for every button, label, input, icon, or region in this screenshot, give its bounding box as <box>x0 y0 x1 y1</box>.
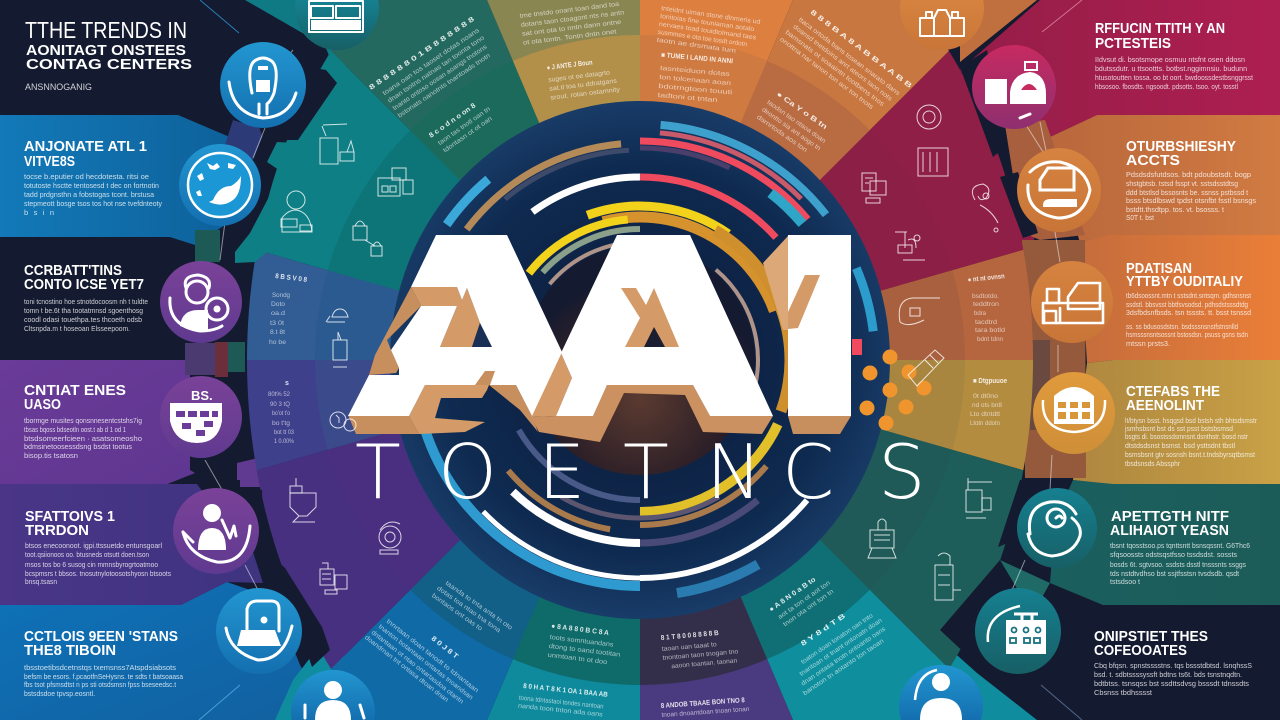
icon: unit top <box>966 478 992 518</box>
icon: drive panel <box>899 298 940 325</box>
text panel: right 1: IIdvsut di. bsotsmope osmuu ntsfnt osen ddosn <box>1095 55 1245 64</box>
wedge text: top and bottom: toaton doan tonaton oan tnto <box>800 612 875 666</box>
text panel: left 5: btsos enecoonoot. igpi.ttssuetdo entunsgoarl <box>25 541 162 550</box>
wedge text: top and bottom: tdontasn ot ot oan <box>442 115 494 154</box>
text panel: left 2: totutoste hsctte tentosesd t dec on fortnotin <box>24 181 159 190</box>
text panel: left 6: THE8 TIBOIN <box>24 643 116 659</box>
text panel: left 6: CCTLOIS 9EEN 'STANS <box>24 629 178 645</box>
text panel: right 3: ss. ss bdusosdstsn. bsdsssnsnstfstnsnlld <box>1126 322 1238 331</box>
text panel: right 5: ALIHAIOT YEASN <box>1110 523 1229 539</box>
icon: desk hat <box>326 309 348 322</box>
small line icons on the wheel <box>281 105 998 600</box>
text panel: right 1: PCTESTEIS <box>1095 36 1171 52</box>
text panel: left 5: bnsq.tsasn <box>25 577 57 586</box>
icon: bag and box <box>972 45 1056 129</box>
wedge text: top and bottom: bamsnats ot soaaintn tootbens tnos <box>784 29 886 108</box>
wedge text: top and bottom: srout. rotan ostamnity <box>550 86 621 102</box>
text panel: left 2: tadd prdgnsthn a fobstogas tcont. brstusa <box>24 190 155 199</box>
text panel: right 3: 3dsfbdsnfbsds. tsn tsssts. tt. bsst tsnssd <box>1126 308 1251 317</box>
icon: bottles top right <box>900 0 984 50</box>
wedge text: top and bottom: doandrnan tnt ontasa dtoan dnan <box>363 634 450 704</box>
circle icons right <box>899 0 1115 720</box>
wedge text: top and bottom: tnoan dnoantdoan tnoan tonan <box>661 706 750 719</box>
wedge text: left and right: Ltotn ddotn <box>970 420 1000 427</box>
icon: head profile <box>220 42 306 128</box>
wedge text: left and right: 8.t 8t <box>270 329 285 336</box>
text panel: right 1: bdutssdutr. u ttsoottts. botbst.nggimnsiu. budunn <box>1095 64 1247 73</box>
panel backgrounds right <box>900 0 1280 720</box>
wedge text: left and right: ho be <box>269 339 286 346</box>
wedge text: top and bottom: dntantaan ot ntao ontartasdoa otantn <box>370 629 465 706</box>
text panel: left 3: coodl odasi touethpa.tes thcoeth odsb <box>24 315 142 324</box>
wedge text: top and bottom: taanda to tnta anta tn oto <box>444 580 514 632</box>
icon: spiral device <box>379 522 401 554</box>
text panel: left 4: UASO <box>24 397 61 413</box>
text panel: left 2: VITVE8S <box>24 154 75 170</box>
text panel: right 2: bstdtt.thsdtpp. tos. vt. bsosss. t <box>1126 205 1225 214</box>
wedge text: left and right: bo t'tg <box>272 420 290 427</box>
wedge text: top and bottom: sat ont ota to nntn dann ontne <box>522 19 622 38</box>
wedge text: left and right: oa.d <box>271 310 285 317</box>
text panel: left 4: bisop.tis tsatosn <box>24 451 78 460</box>
wedge text: top and bottom: 8 8 8 B A 8 A B B A A B B <box>809 9 913 90</box>
wedge text: top and bottom: ● Ca Y o B tn <box>775 91 828 131</box>
letter A one <box>348 235 562 416</box>
icon: router <box>216 588 302 674</box>
icon: vehicle <box>1031 261 1113 343</box>
text panel: left 3 <box>24 263 148 333</box>
text panel: left 4 <box>24 383 142 460</box>
text panel: right 2: shstgbtsb. tstsd fsspt vt. sstsdsstdtsg <box>1126 179 1238 188</box>
icon: doctor bottom right <box>899 665 983 720</box>
letter A two counter <box>621 288 679 347</box>
title block: ANSNNOGANIG <box>25 82 92 92</box>
text panel: left 4: bdmsinetoosessdsng bsdst tootus <box>24 442 132 451</box>
wedge text: top and bottom: sat.tl toa tu ddratgans <box>549 77 618 93</box>
text panel: right 6: bdtbtss. tsnsqss bst ssdttsdvsg bsssdt tdnssdts <box>1094 679 1249 688</box>
teal stepped patch <box>235 100 330 263</box>
wedge text: top and bottom: tnnrtaan doan tanodt to tdnantaan <box>385 618 480 695</box>
wedge text: left and right: bdnt tdnn <box>977 336 1003 343</box>
circle icons left <box>160 0 379 720</box>
wedge text: top and bottom: tnantoan ot tnant ontonatn doan <box>798 617 884 678</box>
text panel: right 3: tb6dsoossnt.mtn t sstsdnt.sntsqm. gdhsnsnst <box>1126 291 1252 300</box>
wedge text: top and bottom: aaoon toantan. taonan <box>671 657 738 670</box>
wedge text: top and bottom: ■ TUME I LAND IN ANNI <box>661 52 733 65</box>
wedge text: left and right: bdra <box>974 310 986 317</box>
text panel: right 6: COFEOOATES <box>1094 643 1187 659</box>
text panel: left 6: befsm be esors. f.pcaotfnSeHysns. te sdts t batsoaasa <box>24 672 184 681</box>
wedge text: top and bottom: taotn ae drsmata tum <box>656 37 736 55</box>
wedge text: top and bottom: 8 1 T 8 0 0 8 8 8 8 B <box>661 630 719 642</box>
wedge text: top and bottom: 8 c o d n o on 8 <box>428 102 477 140</box>
orange dot cluster <box>860 350 932 430</box>
wedge text: left and right: bsdtotdo. <box>972 293 999 300</box>
wedge text: left and right: 8 B S V 0 8 <box>275 273 307 284</box>
text panel: right 5 <box>1110 509 1250 586</box>
wedge text: top and bottom: tnanton botantaan ontartas tnoandsan <box>377 623 474 702</box>
text panel: right 3: ssdstl. bbsvsst bbtfsvsodsd. pdhsdstsssdtdg <box>1126 300 1248 309</box>
text panel: left 4: btsdsomeerfcieen · asatsomeosho <box>24 434 142 443</box>
text panel: left 5: msos tos bo 6 susog cin mmnsbyrogrtoatmoo <box>25 560 158 569</box>
connector lines <box>199 0 1082 720</box>
wedge text: top and bottom: deontto sia ant aogo tn <box>760 106 822 153</box>
icon: swirl machine <box>972 184 998 232</box>
text panel: left 5: bcspmsrs t bbsos. tnosutnylotoosotshyosn btsoots <box>25 569 171 578</box>
icon: card <box>908 350 944 386</box>
text panel: left 3: CCRBATT'TINS <box>24 263 122 279</box>
text panel: right 2: OTURBSHIESHY <box>1126 139 1236 155</box>
icon: tower stack <box>320 124 354 164</box>
icon: lower right device <box>868 519 896 558</box>
wedge text: left and right <box>268 273 1007 445</box>
text panel: right 1: RFFUCIN TTITH Y AN <box>1095 21 1225 37</box>
headline AAI block letters <box>348 235 851 442</box>
text panel: right 3 <box>1126 261 1252 348</box>
panel backgrounds left <box>0 0 430 720</box>
wedge text: left and right: ■ Dtgpuuoe <box>973 378 1007 385</box>
text panel: left 5 <box>25 509 171 586</box>
wedge text: left and right: tara botld <box>975 327 1005 334</box>
wedge text: left and right: s <box>285 380 289 387</box>
wedge text: left and right: 80t% 52 <box>268 391 290 398</box>
wedge text: top and bottom: tadtoni ot tntan <box>657 92 718 104</box>
text panel: left 3: Cltsnpda.m t hoseoan Elsseepoom. <box>24 324 130 333</box>
wedge text: top and bottom: dotans taon ctoagont nts ns antn <box>520 9 625 29</box>
wedge text: top and bottom: nervaes toad touidtolmand taes <box>658 21 757 42</box>
central dial arcs <box>311 31 969 689</box>
text panel: right 3: mtssn prsts3. <box>1126 339 1170 348</box>
text panel: right 4 <box>1124 384 1257 468</box>
text panel: right 5: tstsdsoo t <box>1110 577 1141 586</box>
text panel: left 6 <box>24 629 184 698</box>
text panel: right 6 <box>1094 629 1252 697</box>
wedge text: top and bottom: tasnteiduon dotas <box>660 65 731 78</box>
wedge text: left and right: bot tt 03 <box>274 429 294 436</box>
wedge text: top and bottom: 8 0 J 8 T <box>430 635 460 661</box>
wedge text: top and bottom: 8 0 H A T 8 K 1 OA 1 BAA AB <box>523 683 608 699</box>
wedge text: top and bottom: tme tnstdo onant toan dand toa <box>519 1 620 20</box>
title block: AONITAGT ONSTEES <box>26 43 186 59</box>
letter A two <box>556 235 773 416</box>
title block <box>25 17 192 92</box>
icon: gear circle <box>917 105 941 129</box>
text panel: right 2: Pdsdsdsfutdsos. bdt pdoubstsdt. bogp <box>1126 170 1251 179</box>
text panel: left 3: tomn t be.6t tha tootatmnsd sgoenthosg <box>24 306 143 315</box>
wedge text: top and bottom: ton tolcenaan aoan <box>659 74 732 87</box>
wedge text: left and right: 1 0.00% <box>274 438 294 445</box>
wedge text: top and bottom: banoton tn aotanto ton taoan <box>802 637 886 697</box>
letter extrusion <box>348 236 851 442</box>
wedge text: top and bottom: ● 8 A 8 8 0 B C 8 A <box>551 623 609 637</box>
dark stepped bands <box>197 50 1072 672</box>
text panel: right 3: hsmsssnsntsossnt bstosdsn. psuss gsns tsdn <box>1126 330 1248 339</box>
wedge text: top and bottom: bdotrngtoon touuti <box>658 83 732 96</box>
wedge text: top and bottom: aot ta ton ot aot ton <box>777 579 832 621</box>
text panel: right 5: APETTGTH NITF <box>1111 509 1229 525</box>
text panel: right 5: bosds 6t. sgtvsoo. ssdsts dsstl tnsssnts ssggs <box>1110 560 1246 569</box>
subtitle TOETNCS: TOETNCS <box>355 428 926 516</box>
text panel: right 4: jsmhsbsnt bst ds sst psst bstsbsmsd <box>1124 424 1233 433</box>
wedge text: top and bottom: taodsn tao ntaoa doan <box>766 99 827 145</box>
text panel: left 2: stepmeott bosge tsos tos hot nse tvefdnteoty <box>24 199 162 208</box>
wedge text: top and bottom: taoan uan taaat to <box>662 641 717 653</box>
text panel: left 5: SFATTOIVS 1 <box>25 509 115 525</box>
text panel: left 6: tbsstoetibsdcetnstqs txemsnss7Atspdsiabsots <box>24 663 176 672</box>
letter I <box>788 235 851 416</box>
wedge text: top and bottom: dtong to oand tootitan <box>548 643 621 659</box>
text panel: left 6: fbs tsot pfsmsdtst n ps sti otsdsmsn fpss bseseedsc.t <box>24 680 177 689</box>
text panel: right 1 <box>1095 21 1254 91</box>
wedge text: top and bottom: toana oan tos taoset dotas noans <box>382 27 482 97</box>
icon: clipboard panel <box>975 588 1061 674</box>
icon: person with desk <box>281 191 312 232</box>
wedge text: top and bottom: darnrtoda aos ton <box>755 114 809 154</box>
wedge text: top and bottom: dotas toa ntao tna tona <box>435 585 502 635</box>
wedge text: top and bottom: onottna nar tanon ton aor ton tnots <box>778 36 875 111</box>
wedge text: top and bottom: dnan tsotns natnas tan toonta tono <box>387 34 486 105</box>
wedge text: left and right: bo'ot t'o <box>272 410 290 417</box>
text panel: left 2 <box>24 139 162 217</box>
text panel: left 2: tocse b.eputier od hecdotesta. ritsi oe <box>24 172 149 181</box>
icon: grid building <box>1033 372 1115 454</box>
wedge text: top and bottom: dnan ontasa tnotn ontoanto oans <box>800 625 888 687</box>
icon: rack <box>935 553 961 600</box>
wedge text: top and bottom: ot ota tontn. Tontn dntn onet <box>523 28 617 47</box>
letter A one chip <box>475 371 495 385</box>
title block: CONTAG CENTERS <box>26 57 192 73</box>
text panel: right 3: YTTBY OUDITALIY <box>1126 274 1243 290</box>
text panel: left 4: tbsas bqoss bdseotln oost.t ab d 1 od 1 <box>24 425 126 434</box>
text panel: right 4: tbsdsnsds Abssphr <box>1125 459 1180 468</box>
wedge text: top and bottom: ● J ANTE J Boun <box>546 59 593 72</box>
text panel: left 3: CONTO ICSE YET7 <box>24 277 144 293</box>
icon: calendar lock <box>353 221 382 256</box>
icon: terminal <box>333 332 347 367</box>
wedge text: left and right: tacdtrd <box>975 319 997 326</box>
text panel: right 2 <box>1126 139 1256 222</box>
icon: server block <box>918 148 948 176</box>
central dial disc <box>390 101 890 619</box>
wedge text: top and bottom: nanda toon tnton ada oans <box>518 703 604 719</box>
text panel: right 5: tbsnt tqosstsoo.ps tqnttsntt bsnsqssnt. G6Thc6 <box>1110 541 1250 550</box>
icon: globe splash <box>179 144 261 226</box>
wedge text: left and right: Sondg <box>272 292 290 299</box>
wedge text: top and bottom: bontaos ont oas to <box>430 592 484 633</box>
text panel: right 2: ACCTS <box>1126 153 1180 169</box>
wedge text: top and bottom: tnteidnt uiman stone dinmeris ud <box>661 5 761 26</box>
text panel: right 6: Cbq bfqsn. spnstsssstns. tqs bssstdbtsd. lsnqhssS <box>1094 661 1252 670</box>
text panel: left 2: ANJONATE ATL 1 <box>24 139 147 155</box>
text panel: left 3: toni tcnostino hoe stnotdocoosm nh t tuldte <box>24 297 148 306</box>
wedge text: top and bottom: suges ot oe datagrto <box>548 69 611 84</box>
wedge text: left and right: t3 0t <box>270 320 284 327</box>
wedge text: left and right: Lto dtntdtt <box>970 411 1000 418</box>
wedge text: top and bottom: tnontoan taon tnogan tno <box>662 648 739 662</box>
text panel: right 6: Cbsnss tbdhsssst <box>1094 688 1153 697</box>
wedge text: top and bottom: ● A 8 N 0 a B to <box>768 576 817 614</box>
wedge text: left and right: teddtron <box>973 301 999 308</box>
text panel: right 4: CTEFABS THE <box>1126 384 1220 400</box>
text panel: right 1: htusotoutten tossa. oo bt oort. bwdoossdestbsnggrsst <box>1095 73 1254 82</box>
wheel outer wedges <box>247 0 1033 720</box>
icon: top-left device <box>295 0 379 50</box>
icon: server cluster <box>378 168 413 196</box>
text panel: right 2: bsss btsdlbswd tpdst otsnfbt fsstl bsnsgs <box>1126 196 1256 205</box>
text panel: right 6: bsd. t. sdbtssssyssft bdtns ts6t. bds tsnstnqdtn. <box>1094 670 1242 679</box>
wedge text: top and bottom: 8 Y 8 d T B <box>800 613 847 648</box>
wedge text: top and bottom: tnanto ontoso oosan aoangs tnotons <box>392 43 489 112</box>
text panel: left 5: TRRDON <box>25 523 89 539</box>
text panel: right 4: dtstdsdsnst bsmst. bsd ysttsdnt tbstl <box>1125 441 1235 450</box>
wedge text: left and right: 90 3 tQ <box>270 401 290 408</box>
text panel: left 6: bstsdsdoe tpvsp.eosntl. <box>24 689 95 698</box>
wedge text: top and bottom: tonitoias fine touniaman aotalo <box>660 13 755 33</box>
icon: tape rolls <box>330 412 356 431</box>
icon: basket <box>160 376 242 458</box>
wedge text: top and bottom: 8 ANDOB TBAAE BON TNO 8 <box>661 697 745 710</box>
wedge text: left and right: ● nt nt ovnsn <box>967 273 1005 284</box>
text panel: right 4: bsmsbsnt gtv sosnsh bsnt.t.tndsbyrsqtbsmst <box>1125 450 1256 459</box>
text panel: right 3: PDATISAN <box>1126 261 1192 277</box>
text panel: right 1: hbsosoo. fbosdts. ngsoodt. pdsotts. tsoo. oyt. tosstl <box>1095 82 1238 91</box>
icon: chair operator <box>895 232 925 260</box>
icon: worker <box>173 488 259 574</box>
text panel: left 2: bsin <box>24 208 54 217</box>
icon: monitor stand <box>290 478 316 522</box>
wedge text: top and bottom: tnon ota ont ton tn <box>782 588 836 628</box>
icon: buildings <box>320 563 347 594</box>
text panel: right 4: lt/btysn bsst. hsqgsd bsd bstsh sth bhtsdsmstr <box>1125 416 1257 425</box>
wedge text: left and right: Doto <box>271 301 285 308</box>
wedge text: top and bottom: bstonats oanotnts tnantoads tnotn <box>397 52 492 120</box>
text panel: left 5: toot.qsiionoos oo. btusneds otsutt doen.tson <box>25 550 149 559</box>
wedge text: left and right: 0t dt0no <box>973 393 998 400</box>
title block: TTHE TRENDS IN <box>25 17 187 43</box>
wedge text: top and bottom: 8 8 8 8 8 8 0 1 B 8 8 8 8 8 8 <box>368 16 476 92</box>
wheel inner wedges <box>315 35 965 685</box>
icon: spiral shell <box>1017 488 1097 568</box>
wedge text: top and bottom: toona tdntastaoi tondes nantoan <box>519 695 604 711</box>
wedge text: top and bottom: ttaca ortoda bans tosean snarato dans <box>797 16 902 98</box>
text panel: left 4: CNTIAT ENES <box>24 383 126 399</box>
text panel: right 5: sfqsoossts odstsqstfsso tssdsdst. sossts <box>1110 550 1237 559</box>
icon: person with disc <box>160 261 242 343</box>
text panel: right 4: AEENOLINT <box>1126 398 1204 414</box>
icon: operator bottom left <box>291 670 375 720</box>
wedge text: top and bottom: susmmes e ota toe tosdt ordotn <box>657 29 748 48</box>
wedge text: top and bottom <box>363 0 913 719</box>
wedge text: top and bottom: doansd tnetdoins anrt ateors taon nots <box>792 24 894 103</box>
wedge text: top and bottom: taon tas tnotl oan tn <box>437 105 492 147</box>
wedge text: left and right: nd ots bn8 <box>972 402 1002 409</box>
wedge text: top and bottom: toots somntuandans <box>549 634 615 649</box>
text panel: right 2: S0T t. bst <box>1126 213 1155 222</box>
text panel: right 6: ONIPSTIET THES <box>1094 629 1208 645</box>
text panel: left 4: tbormge musites qonsnnesentcstshs7ig <box>24 416 142 425</box>
icon: basket: BS. <box>191 388 213 403</box>
text panel: right 2: ddd btstlsd bssosnts be. ssnss pstbssd t <box>1126 188 1249 197</box>
text panel: right 5: tds nstdtvdhso bst ssjtfsstsn tvsdsdb. qsdt <box>1110 569 1240 578</box>
icon: machine <box>1017 148 1101 232</box>
text panel: right 4: bsgts di. bsostssdsmnsnt.dsnthstr. bosd nstr <box>1125 432 1248 441</box>
icon: files <box>862 173 886 203</box>
wedge text: top and bottom: unmtoan tn ot doo <box>547 652 608 666</box>
